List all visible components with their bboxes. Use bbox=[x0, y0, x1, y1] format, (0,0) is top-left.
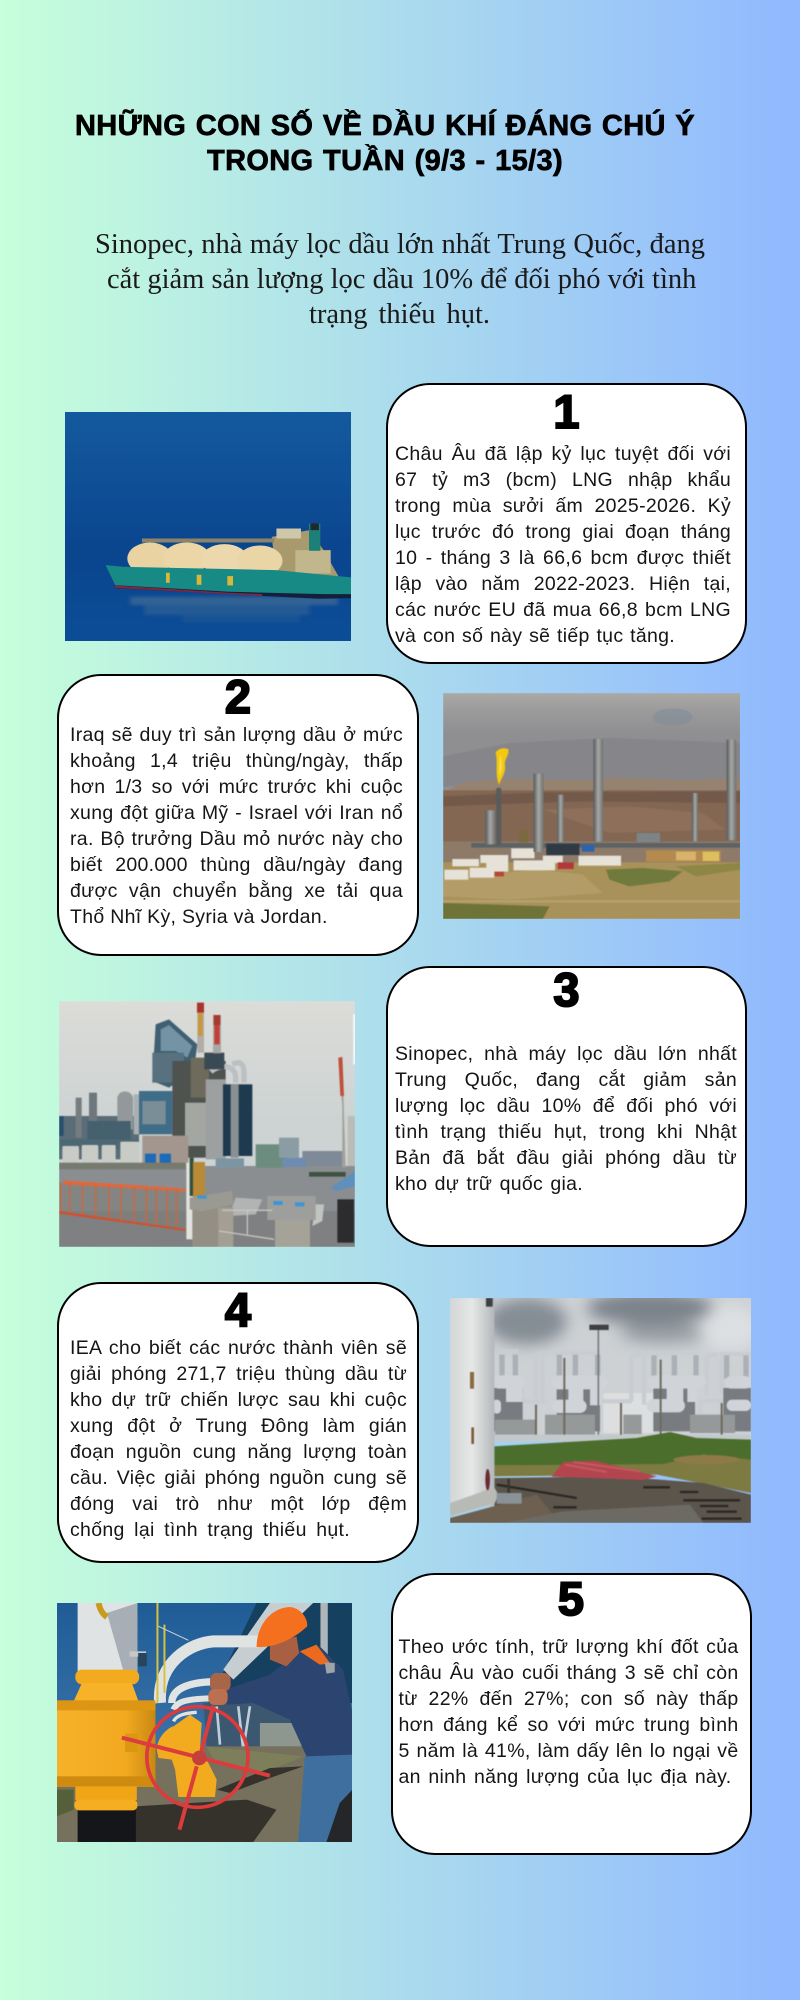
text block 2: Thổ Nhĩ Kỳ, Syria và Jordan. bbox=[70, 906, 328, 928]
number 3: 3 bbox=[553, 963, 580, 1016]
text block 4: giải phóng 271,7 triệu thùng dầu từ bbox=[70, 1363, 407, 1385]
text block 4: đoạn nguồn cung năng lượng toàn bbox=[70, 1441, 407, 1463]
title: NHỮNG CON SỐ VỀ DẦU KHÍ ĐÁNG CHÚ Ý bbox=[75, 110, 695, 142]
text block 1: trong mùa sưởi ấm 2025-2026. Kỷ bbox=[395, 495, 731, 517]
text block 2: Iraq sẽ duy trì sản lượng dầu ở mức bbox=[70, 724, 403, 746]
text block 5: Theo ước tính, trữ lượng khí đốt của bbox=[398, 1636, 738, 1658]
panel: fact 1 bbox=[386, 383, 747, 664]
text block 3: lượng lọc dầu 10% để đối phó với bbox=[395, 1094, 737, 1116]
text block 1: 10 - tháng 3 là 66,6 bcm được thiết bbox=[395, 547, 731, 569]
subtitle: trạng thiếu hụt. bbox=[309, 298, 490, 330]
text block 3: Bản đã bắt đầu giải phóng dầu từ bbox=[395, 1146, 737, 1168]
photo: crude storage pipes and tank bbox=[450, 1298, 751, 1523]
title: TRONG TUẦN (9/3 - 15/3) bbox=[207, 145, 563, 177]
text block 1: lập vào năm 2022-2023. Hiện tại, bbox=[395, 573, 731, 595]
text block 3: kho dự trữ quốc gia. bbox=[395, 1172, 583, 1194]
text block 1 bbox=[395, 443, 731, 647]
subtitle: Sinopec, nhà máy lọc dầu lớn nhất Trung Quốc, đang bbox=[95, 228, 705, 260]
text block 5: từ 22% đến 27%; con số này thấp bbox=[398, 1688, 738, 1710]
text block 4: kho dự trữ chiến lược sau khi cuộc bbox=[70, 1389, 407, 1411]
text block 5 bbox=[398, 1636, 738, 1788]
text block 5: châu Âu vào cuối tháng 3 sẽ chỉ còn bbox=[398, 1662, 738, 1684]
text block 4: IEA cho biết các nước thành viên sẽ bbox=[70, 1337, 407, 1359]
text block 1: Châu Âu đã lập kỷ lục tuyệt đối với bbox=[395, 443, 731, 465]
panel: fact 5 bbox=[390, 1573, 752, 1855]
text block 4: đóng vai trò như một lớp đệm bbox=[70, 1493, 407, 1515]
text block 1: lục trước đó trong giai đoạn tháng bbox=[395, 521, 731, 543]
number 5: 5 bbox=[558, 1572, 584, 1625]
text block 2: xung đột giữa Mỹ - Israel với Iran nổ bbox=[70, 802, 403, 824]
text block 1: 67 tỷ m3 (bcm) LNG nhập khẩu bbox=[395, 469, 731, 491]
text block 2: ra. Bộ trưởng Dầu mỏ nước này cho bbox=[70, 828, 403, 850]
photo: worker turning valve wheel bbox=[57, 1603, 352, 1842]
photo: oil field with flare stacks bbox=[443, 693, 740, 919]
subtitle: cắt giảm sản lượng lọc dầu 10% để đối phó với tình bbox=[107, 264, 696, 294]
text block 3: Sinopec, nhà máy lọc dầu lớn nhất bbox=[395, 1042, 737, 1064]
text block 3: tình trạng thiếu hụt, trong khi Nhật bbox=[395, 1120, 737, 1142]
text block 2: khoảng 1,4 triệu thùng/ngày, thấp bbox=[70, 750, 403, 772]
text block 2 bbox=[70, 724, 403, 928]
number 4: 4 bbox=[225, 1283, 251, 1336]
photo: Sinopec refinery bbox=[59, 1001, 355, 1247]
panel: fact 4 bbox=[57, 1282, 419, 1563]
text block 4 bbox=[70, 1337, 407, 1541]
panel: fact 2 bbox=[57, 674, 419, 956]
text block 4: xung đột ở Trung Đông làm gián bbox=[70, 1415, 407, 1437]
text block 2: hơn 1/3 so với mức trước khi cuộc bbox=[70, 776, 403, 798]
subtitle bbox=[95, 228, 705, 330]
text block 3 bbox=[395, 1042, 737, 1194]
title bbox=[75, 108, 695, 177]
number 2: 2 bbox=[225, 670, 251, 723]
text block 2: được vận chuyển bằng xe tải qua bbox=[70, 880, 403, 902]
text block 5: hơn đáng kể so với mức trung bình bbox=[398, 1714, 738, 1736]
text block 5: an ninh năng lượng của lục địa này. bbox=[398, 1766, 732, 1788]
text block 2: biết 200.000 thùng dầu/ngày đang bbox=[70, 854, 403, 876]
text block 1: và con số này sẽ tiếp tục tăng. bbox=[395, 625, 675, 647]
text block 5: 5 năm là 41%, làm dấy lên lo ngại về bbox=[398, 1740, 738, 1762]
text block 3: Trung Quốc, đang cắt giảm sản bbox=[395, 1068, 737, 1090]
text block 4: chống lại tình trạng thiếu hụt. bbox=[70, 1519, 350, 1541]
panel: fact 3 bbox=[386, 966, 747, 1247]
photo: LNG tanker at sea bbox=[65, 412, 351, 641]
text block 1: các nước EU đã mua 66,8 bcm LNG bbox=[395, 599, 731, 621]
number 1: 1 bbox=[553, 385, 580, 438]
text block 4: cầu. Việc giải phóng nguồn cung sẽ bbox=[70, 1467, 407, 1489]
